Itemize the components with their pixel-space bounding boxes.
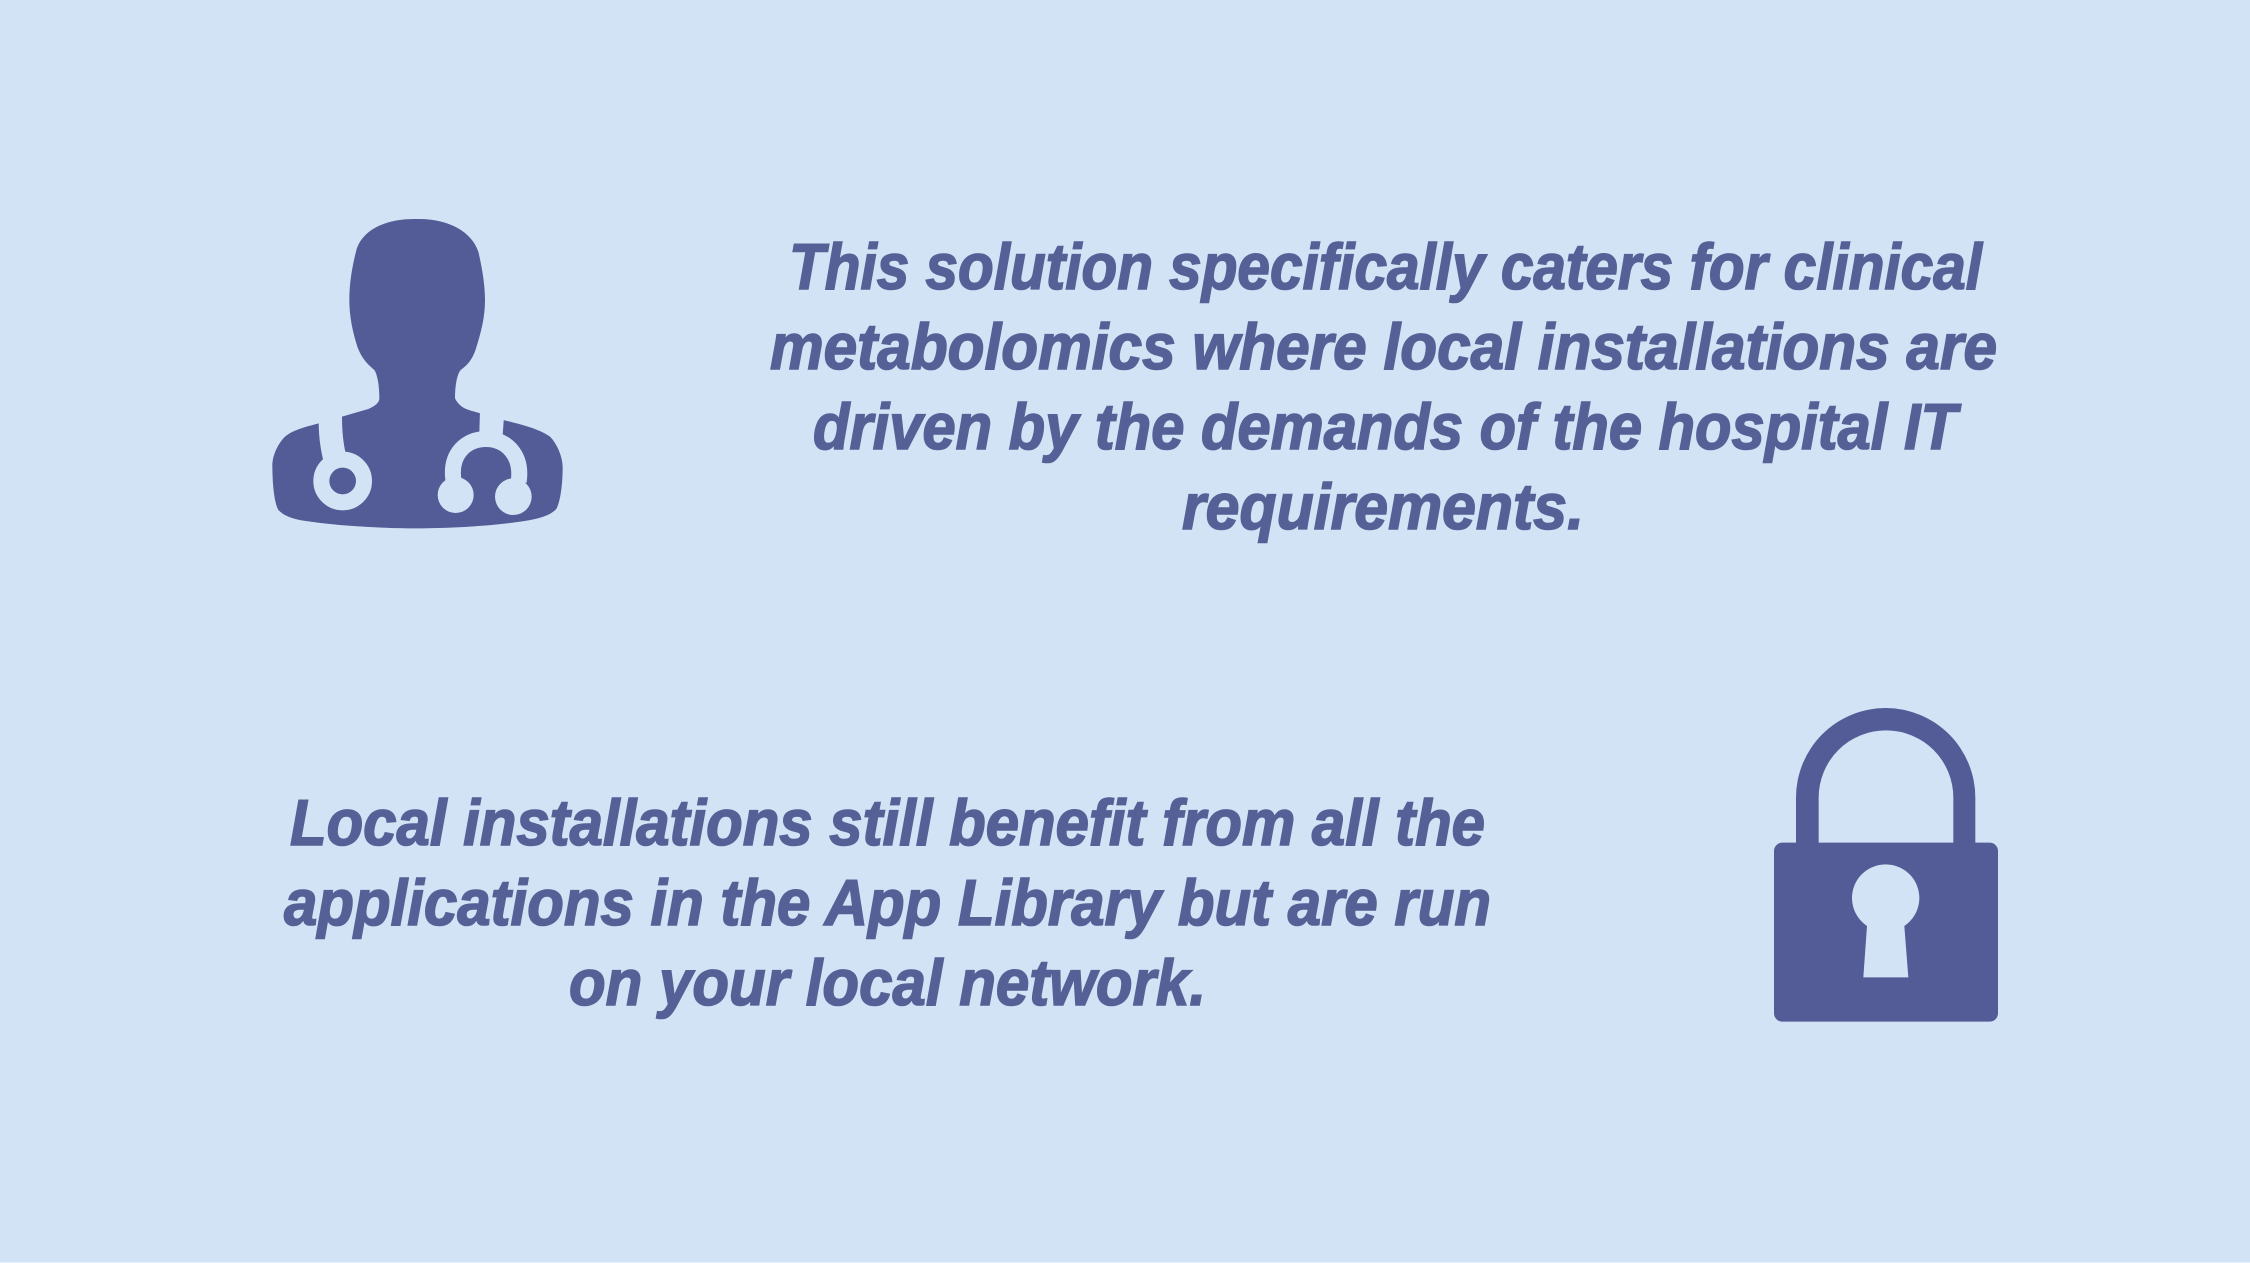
text block: clinical metabolomics: metabolomics where local installations are: [770, 310, 1997, 383]
text block: clinical metabolomics: requirements.: [1182, 470, 1584, 543]
icon: padlock: [1774, 708, 1998, 1022]
stethoscope arc: [453, 439, 519, 482]
keyhole: [1852, 864, 1919, 977]
text block: local installations: on your local network.: [569, 946, 1206, 1019]
text block: local installations: applications in the App Library but are run: [284, 866, 1491, 939]
text block: clinical metabolomics: This solution specifically caters for clinical: [789, 230, 1984, 303]
stethoscope chest piece: [321, 460, 364, 502]
text block: clinical metabolomics: [770, 230, 1997, 543]
stethoscope tube right: [479, 410, 504, 435]
text block: local installations: [284, 786, 1491, 1019]
text block: local installations: Local installations still benefit from all the: [290, 786, 1485, 859]
icon: doctor with stethoscope: [272, 219, 563, 528]
text block: clinical metabolomics: driven by the demands of the hospital IT: [813, 390, 1962, 463]
stethoscope ear tips: [438, 477, 532, 515]
stethoscope tube left: [319, 413, 346, 461]
